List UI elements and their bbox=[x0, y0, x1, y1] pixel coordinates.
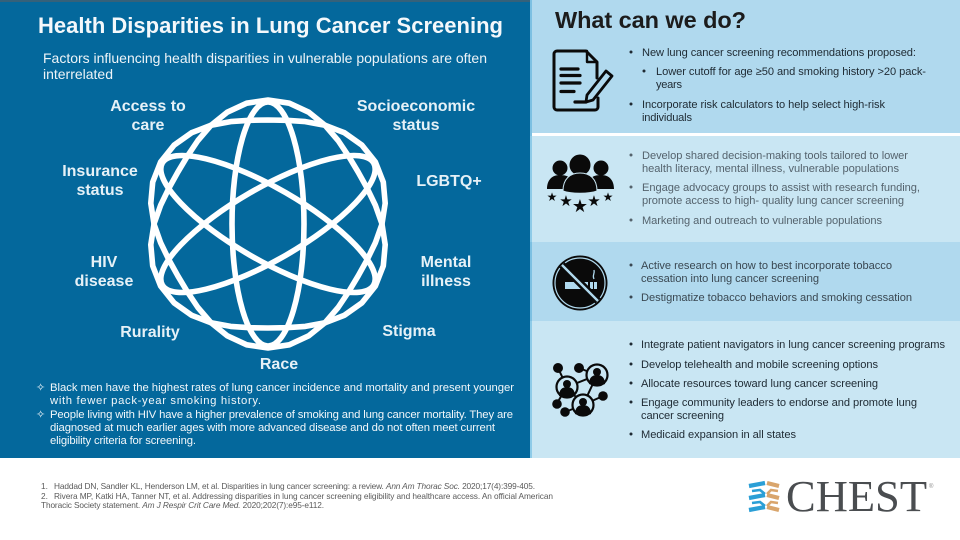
text block: community actions: cancer screening bbox=[641, 410, 724, 422]
subtitle bbox=[43, 50, 487, 82]
text block: outreach actions: Engage advocacy groups to assist with research funding, bbox=[642, 182, 920, 194]
text block: outreach actions bbox=[630, 150, 920, 227]
icon: people with stars: ★ bbox=[559, 192, 573, 210]
label: mental illness: illness bbox=[421, 273, 471, 290]
references: Rivera MP, Katki HA, Tanner NT, et al. Addressing disparities in lung cancer screening eligibility and healthcare access. An official American bbox=[54, 491, 553, 501]
label: HIV disease: disease bbox=[75, 273, 133, 290]
panel: community and systems bbox=[530, 321, 960, 458]
references bbox=[41, 481, 553, 510]
text block: tobacco actions: cessation into lung cancer screening bbox=[641, 273, 819, 285]
label: mental illness: Mental bbox=[421, 254, 471, 271]
subtitle: Factors influencing health disparities in vulnerable populations are often bbox=[43, 50, 487, 66]
text block: tobacco actions bbox=[630, 260, 912, 304]
title: Health Disparities in Lung Cancer Screening bbox=[38, 13, 503, 38]
text block: tobacco actions: Active research on how to best incorporate tobacco bbox=[641, 260, 892, 272]
icon: people with stars: ★ bbox=[587, 192, 601, 210]
label: socioeconomic status: Socioeconomic bbox=[357, 98, 475, 115]
label: insurance status: status bbox=[76, 182, 124, 199]
icon: people with stars: ★ bbox=[547, 190, 557, 204]
text block: community actions: Allocate resources toward lung cancer screening bbox=[641, 378, 878, 390]
references: Thoracic Society statement. Am J Respir Crit Care Med. 2020;202(7):e95-e112. bbox=[41, 500, 324, 510]
text block: community actions: Integrate patient navigators in lung cancer screening programs bbox=[641, 339, 945, 351]
text block: key findings: Black men have the highest rates of lung cancer incidence and mortality and present younger bbox=[50, 382, 514, 394]
panel: tobacco cessation bbox=[530, 242, 960, 321]
text block: key findings: People living with HIV have a higher prevalence of smoking and lung cancer mortality. They are bbox=[50, 409, 513, 421]
logo: CHEST: CHEST bbox=[786, 471, 927, 521]
text block: outreach actions: health literacy, mental illness, vulnerable populations bbox=[642, 163, 899, 175]
text block: community actions: Medicaid expansion in all states bbox=[641, 429, 796, 441]
icon: people with stars bbox=[547, 154, 614, 217]
text block: key findings: ✧ bbox=[36, 408, 45, 421]
text block: key findings: ✧ bbox=[36, 381, 45, 394]
label: rurality: Rurality bbox=[120, 324, 180, 341]
subtitle: interrelated bbox=[43, 66, 113, 82]
text block: community actions bbox=[630, 339, 945, 441]
text block: outreach actions: Develop shared decision-making tools tailored to lower bbox=[642, 150, 908, 162]
icon: people with stars: ★ bbox=[603, 190, 613, 204]
text block: key findings: with fewer pack-year smoking history. bbox=[49, 395, 261, 407]
text block: screening recommendations: Incorporate risk calculators to help select high-risk bbox=[642, 99, 885, 111]
text block: tobacco actions: Destigmatize tobacco behaviors and smoking cessation bbox=[641, 292, 912, 304]
interlocking rings diagram bbox=[144, 100, 392, 348]
label: access to care: Access to bbox=[110, 98, 186, 115]
text block: screening recommendations: years bbox=[656, 79, 682, 91]
text block: screening recommendations: individuals bbox=[642, 112, 692, 124]
references: 2. bbox=[41, 491, 48, 501]
label: HIV disease: HIV bbox=[91, 254, 118, 271]
label: insurance status: Insurance bbox=[62, 163, 138, 180]
logo: CHEST: ® bbox=[929, 483, 934, 490]
heading: what can we do: What can we do? bbox=[555, 7, 746, 33]
text block: outreach actions: Marketing and outreach to vulnerable populations bbox=[642, 215, 882, 227]
label: LGBTQ+: LGBTQ+ bbox=[416, 173, 482, 190]
text block: screening recommendations: New lung cancer screening recommendations proposed: bbox=[642, 47, 916, 59]
text block: community actions: Develop telehealth and mobile screening options bbox=[641, 359, 878, 371]
icon: no smoking bbox=[552, 256, 608, 310]
text block: screening recommendations bbox=[630, 47, 926, 124]
icon: document and pencil bbox=[554, 51, 612, 110]
text block: outreach actions: promote access to high- quality lung cancer screening bbox=[642, 195, 904, 207]
label: stigma: Stigma bbox=[382, 323, 436, 340]
text block: screening recommendations: Lower cutoff for age ≥50 and smoking history >20 pack- bbox=[656, 66, 926, 78]
panel: what can we do header and recommendations bbox=[530, 0, 960, 458]
label: race: Race bbox=[260, 356, 298, 373]
text block: key findings: eligibility criteria for screening. bbox=[50, 435, 196, 447]
label: socioeconomic status: status bbox=[392, 117, 440, 134]
references: 1. bbox=[41, 481, 48, 491]
panel: health disparities bbox=[0, 0, 530, 458]
icon: people with stars: ★ bbox=[572, 196, 588, 217]
text block: key findings bbox=[36, 381, 514, 447]
panel: shared decision-making bbox=[530, 136, 960, 242]
text block: key findings: diagnosed at much earlier ages with more advanced disease and do not often meet current bbox=[50, 422, 496, 434]
references: Haddad DN, Sandler KL, Henderson LM, et al. Disparities in lung cancer screening: a review. Ann Am Thorac Soc. 2020;17(4):399-405. bbox=[54, 481, 535, 491]
label: access to care: care bbox=[132, 117, 165, 134]
icon: network of people bbox=[552, 363, 608, 417]
text block: community actions: Engage community leaders to endorse and promote lung bbox=[641, 397, 917, 409]
